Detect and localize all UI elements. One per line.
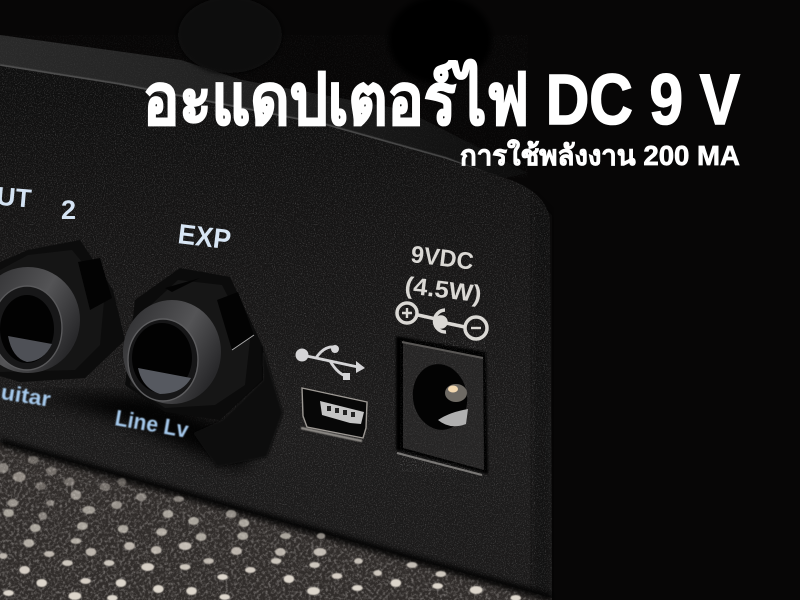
panel label: EXP: EXP <box>176 218 233 255</box>
textured mat with dots <box>0 430 560 600</box>
icon: DC polarity symbol <box>397 303 487 339</box>
panel label: OUT 2: 2 <box>61 195 76 225</box>
subtitle: การใช้พลังงาน 200 MA <box>460 139 740 171</box>
knobs on top <box>178 0 492 84</box>
panel label: 9VDC 4.5W: 9VDC <box>409 241 475 276</box>
panel label: 9VDC 4.5W <box>403 241 483 308</box>
top plate of the pedal <box>0 35 528 186</box>
jack socket: OUT 2 <box>0 240 125 382</box>
cast shadow of EXP jack <box>193 345 283 467</box>
jack socket: EXP <box>123 268 263 420</box>
panel label: Guitar: uitar <box>0 381 52 412</box>
front panel <box>0 66 552 598</box>
icon: USB symbol <box>296 345 365 380</box>
panel label: 9VDC 4.5W: (4.5W) <box>403 272 483 308</box>
panel label: Line Lv: Line Lv <box>113 405 191 443</box>
icon: mini USB port <box>301 388 367 441</box>
panel label: OUT 2 <box>0 181 76 225</box>
shadow under the jacks along the lower panel <box>0 395 260 470</box>
DC power socket <box>396 336 488 475</box>
